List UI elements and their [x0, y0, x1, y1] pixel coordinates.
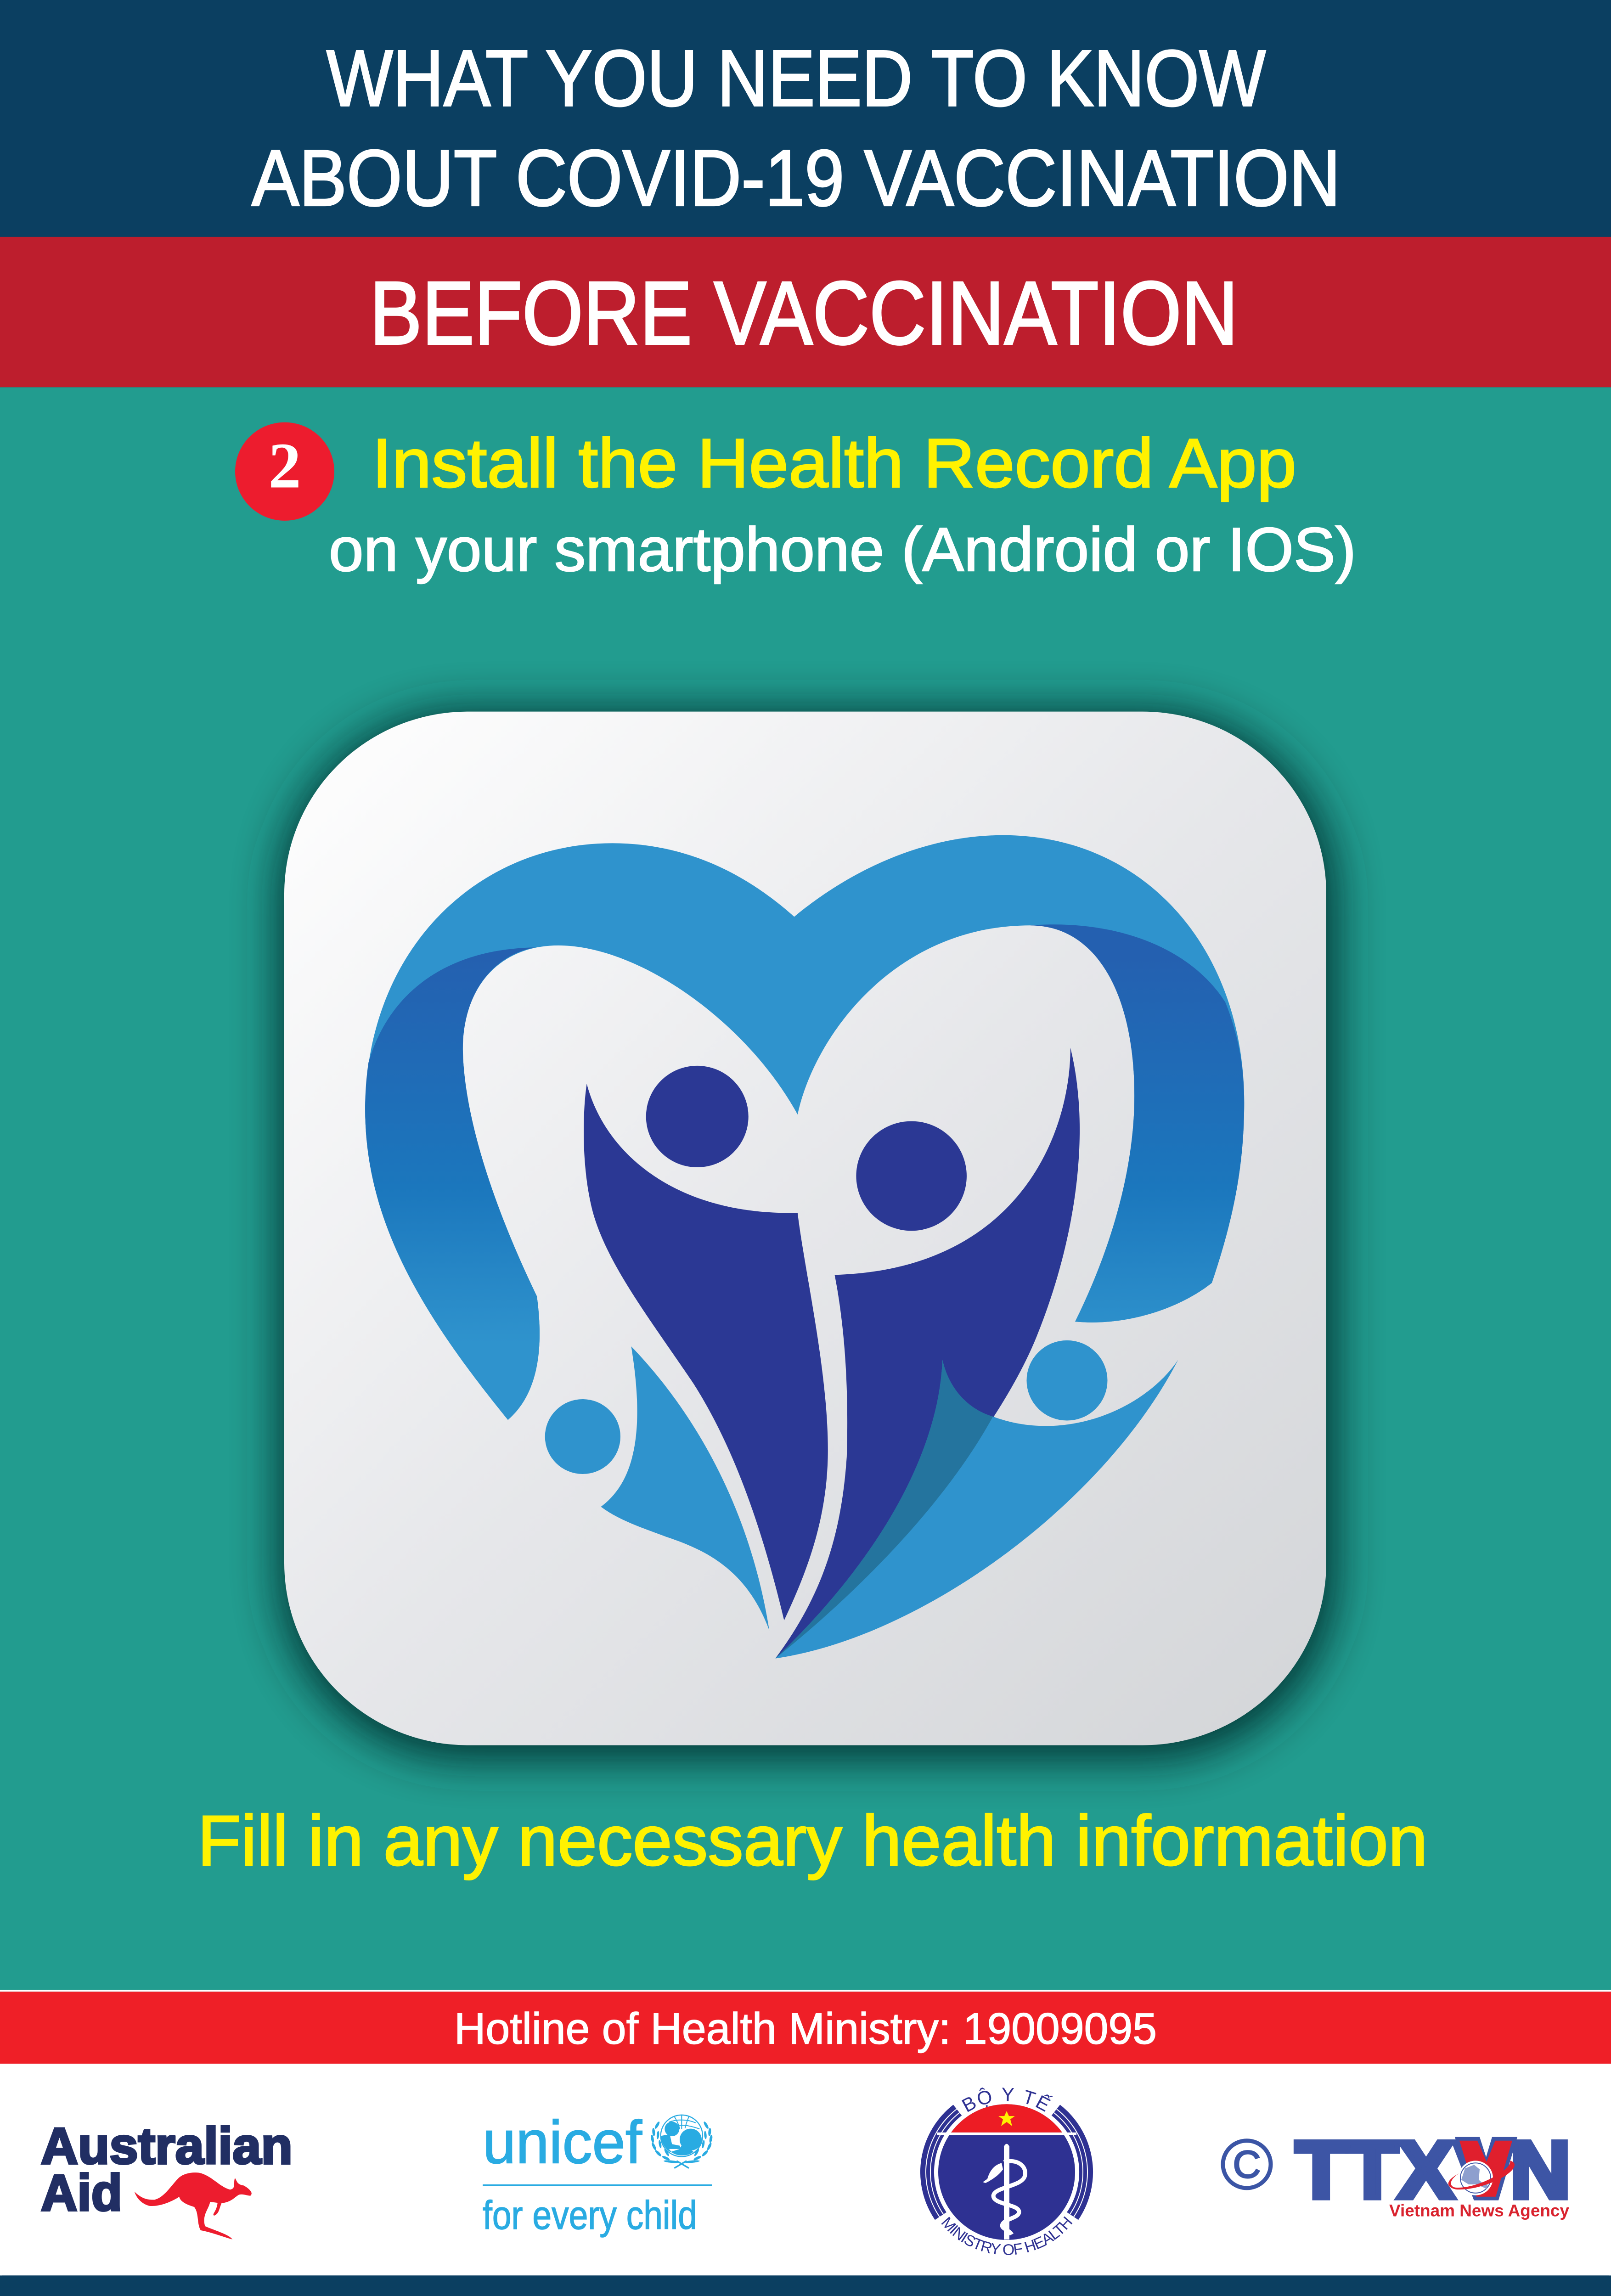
section band: before vaccination: [0, 237, 1611, 387]
header: main title: WHAT YOU NEED TO KNOW: [327, 34, 1266, 123]
heart ribbon: [365, 835, 1244, 1420]
logo: UNICEF: [483, 2109, 713, 2238]
step subheading: on your smartphone (Android or IOS): [329, 515, 1356, 584]
logo strip: [0, 2064, 1611, 2275]
teal background panel: [0, 387, 1611, 1990]
logo: Ministry of Health: [923, 2083, 1090, 2259]
text: Bo Y Te arc: [935, 2083, 1078, 2172]
left child figure: [601, 1346, 769, 1630]
logo: UNICEF: unicef: [483, 2109, 642, 2176]
footer band: [2, 2275, 1609, 2296]
logo: TTXVN Vietnam News Agency: Vietnam News Agency: [1389, 2201, 1570, 2220]
header: main title: ABOUT COVID-19 VACCINATION: [252, 133, 1341, 222]
white divider above hotline: [0, 1990, 1611, 1992]
logo: UNICEF: for every child: [483, 2193, 697, 2238]
copyright symbol: C: [1233, 2143, 1261, 2186]
right adult figure: [775, 1048, 1080, 1659]
logo: Australian Aid: Australian: [41, 2117, 293, 2174]
icon: UNICEF emblem: [650, 2115, 713, 2168]
icon: globe with orbit: [1448, 2161, 1515, 2195]
hotline band: Hotline of Health Ministry: 19009095: [454, 2004, 1157, 2053]
instruction text: Fill in any necessary health information: [197, 1801, 1428, 1880]
section band: before vaccination: BEFORE VACCINATION: [370, 263, 1238, 363]
copyright symbol: [1223, 2141, 1271, 2188]
text: Ministry of Health arc: [923, 2172, 1090, 2259]
header: main title: [0, 0, 1611, 237]
step number badge: 2: [268, 429, 301, 501]
logo: Australian Aid: Aid: [41, 2164, 122, 2221]
right child figure: [775, 1360, 1178, 1659]
logo: Australian Aid: [41, 2117, 293, 2240]
left adult figure: [584, 1084, 828, 1621]
icon: rod of asclepius: [983, 2144, 1025, 2240]
logo: TTXVN Vietnam News Agency: TTXVN: [1296, 2125, 1571, 2215]
hotline band: [0, 1992, 1611, 2064]
app icon: Health Record: [280, 712, 1335, 1759]
icon: star: [998, 2111, 1015, 2126]
step heading: Install the Health Record App: [372, 425, 1296, 502]
text: Bo Y Te arc: BỘ Y TẾ: [958, 2083, 1055, 2116]
text: Ministry of Health arc: MINISTRY OF HEALTH: [938, 2214, 1076, 2259]
icon: kangaroo: [135, 2172, 252, 2240]
step number badge: [235, 422, 334, 521]
